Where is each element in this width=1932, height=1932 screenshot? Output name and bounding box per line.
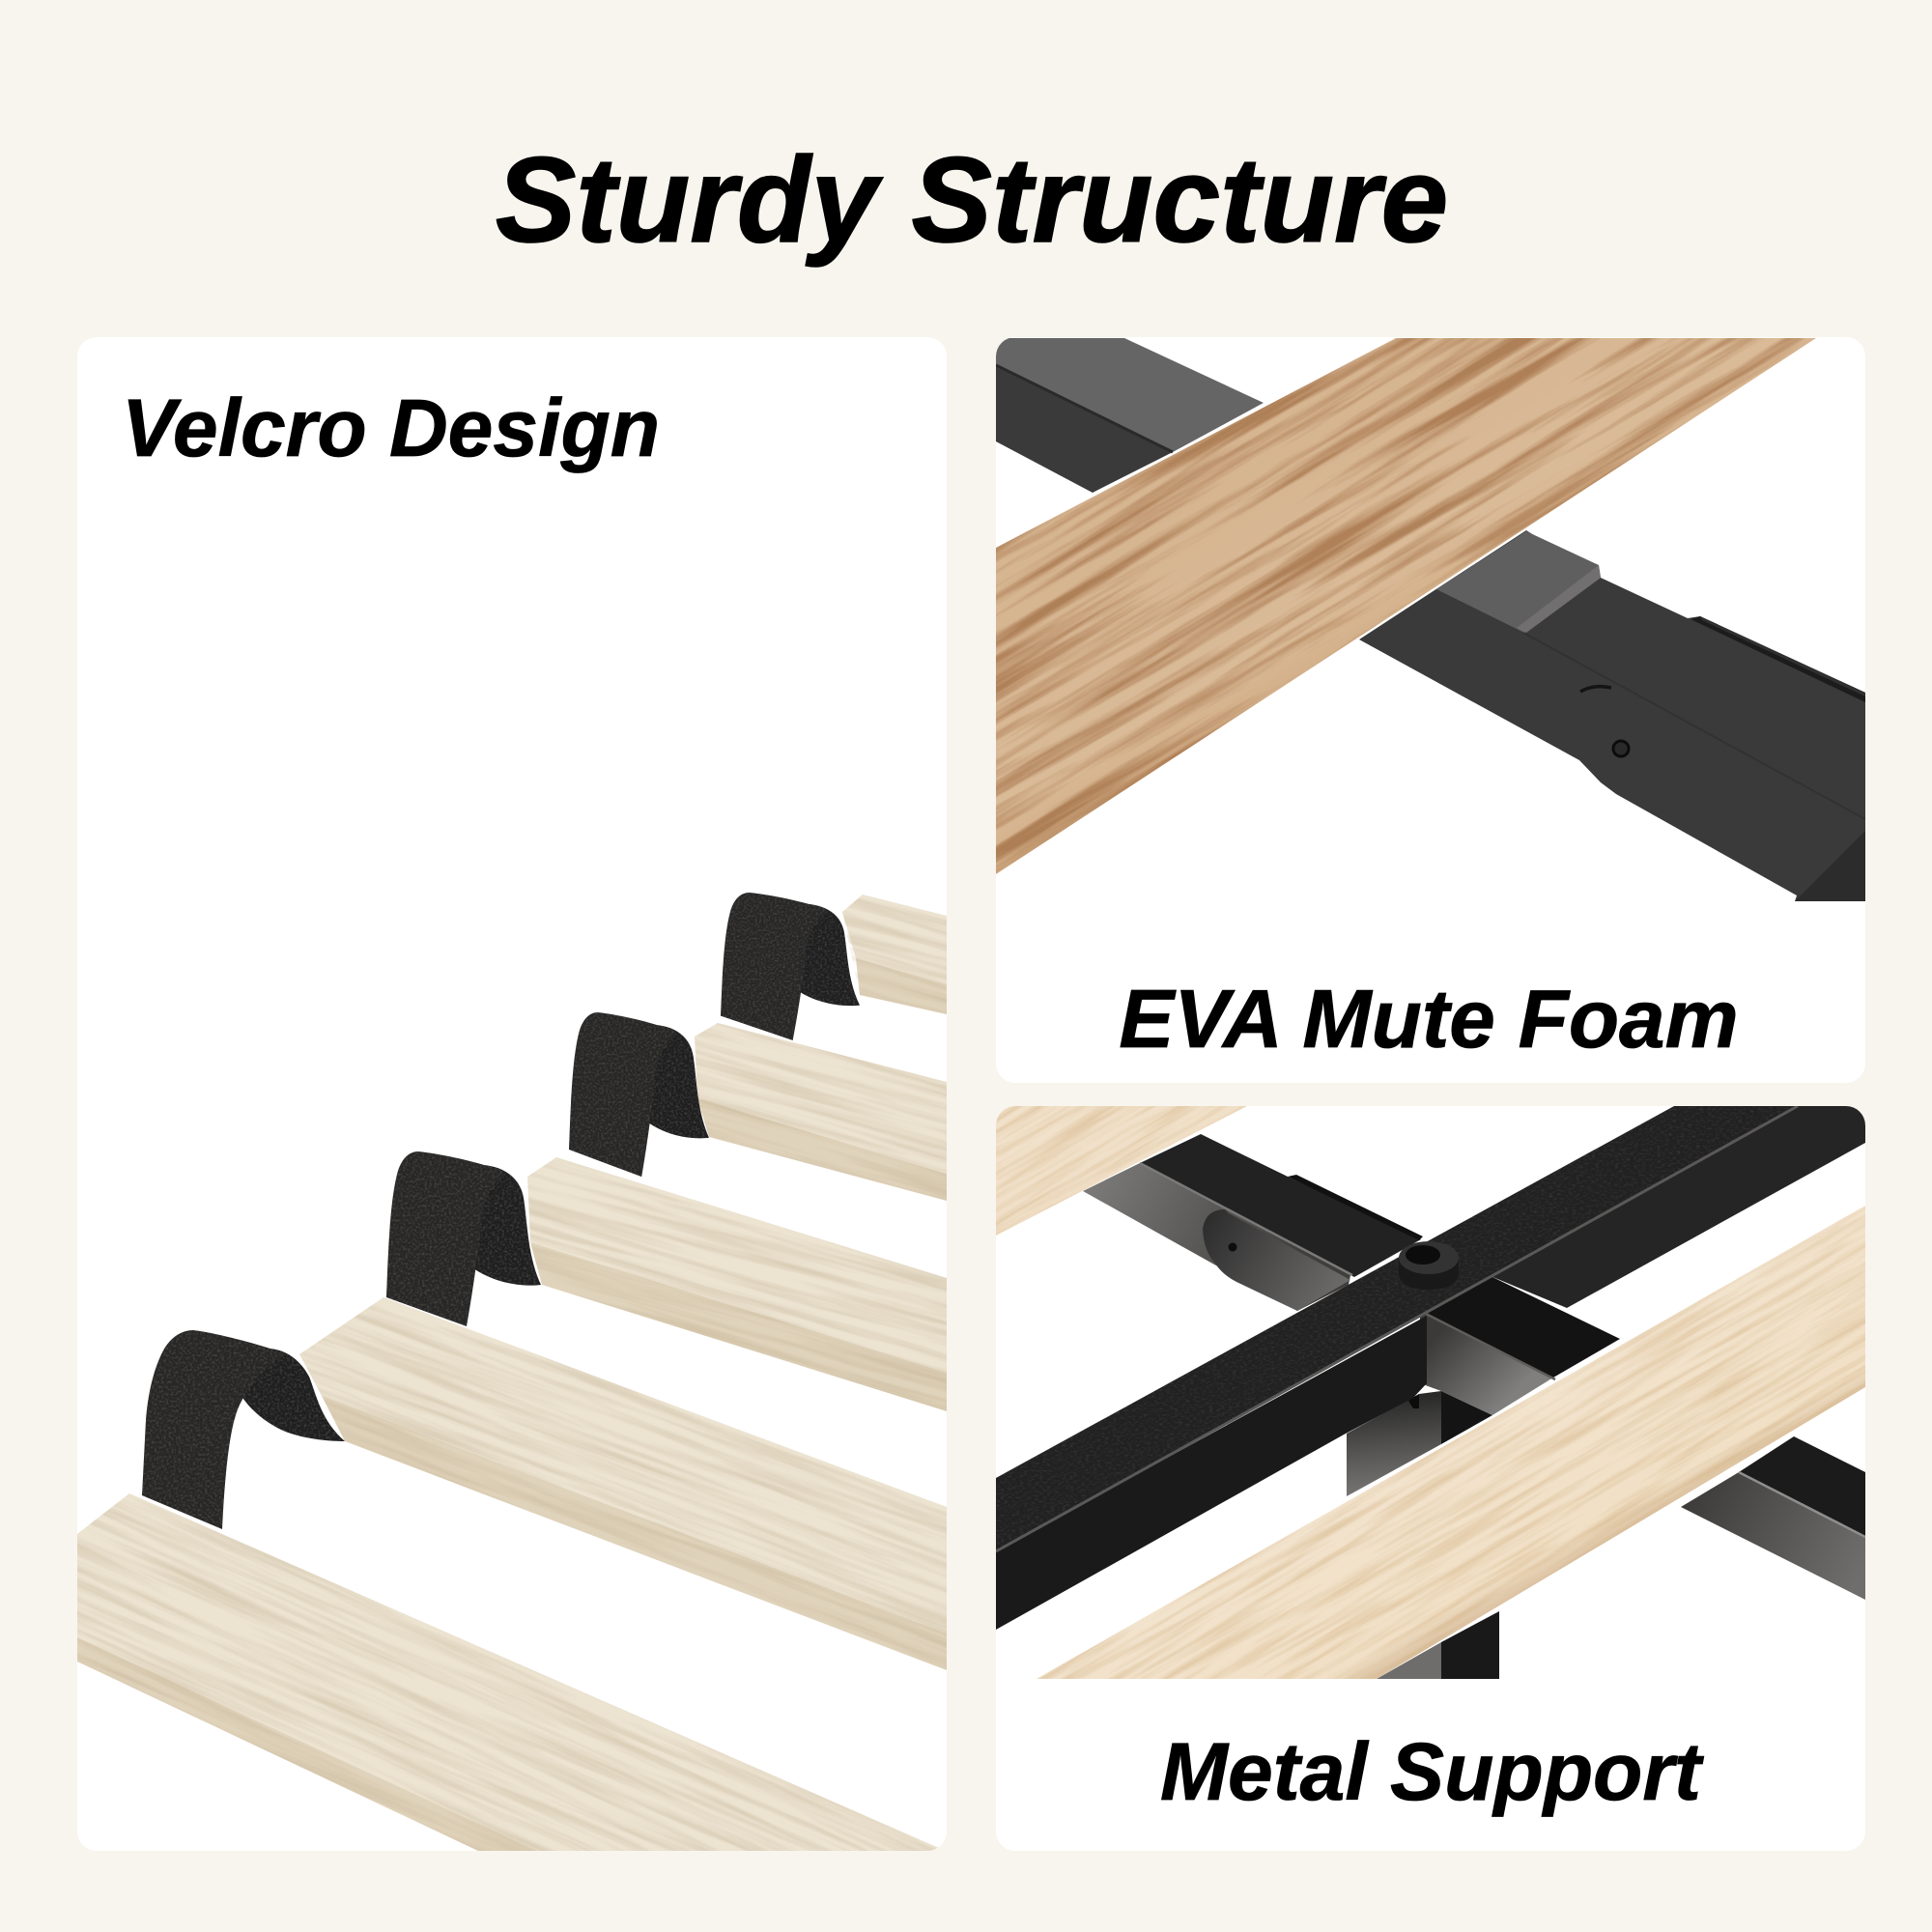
panel: velcro design [77,337,947,1851]
slat 1 [77,1493,939,1851]
main beam top face [996,1106,1798,1551]
slat 3 with strap [386,1151,947,1411]
wood slat [996,338,1816,874]
title: Sturdy Structure [496,133,1448,268]
post [1347,1391,1499,1679]
hex bolt [1399,1241,1459,1290]
panel: metal support [996,1106,1865,1851]
cross rail far right [1681,1436,1865,1600]
lower wood slat [1037,1206,1865,1679]
slat 4 with strap [569,1012,947,1201]
metal rail lower-right section [1359,530,1865,901]
slat 5 with strap [721,893,947,1040]
panel: eva mute foam [996,337,1865,1083]
slats with velcro straps [77,893,947,1851]
heading: velcro design: Velcro Design [122,383,660,473]
cross rail right [1420,1276,1620,1415]
cross rail left [1083,1134,1423,1311]
rail bolt [1613,741,1629,756]
slat 2 with strap [142,1297,947,1670]
bracket plate [1203,1209,1350,1311]
heading: metal support: Metal Support [1160,1726,1704,1817]
metal rail upper-left section [996,338,1264,493]
eva foam pad [1436,531,1601,633]
heading: eva mute foam: EVA Mute Foam [1119,974,1739,1065]
upper wood slat [996,1106,1247,1236]
metal frame and wood slats [996,1106,1865,1679]
main beam front face [996,1106,1865,1630]
metal rail with foam and wood slat [996,338,1865,901]
